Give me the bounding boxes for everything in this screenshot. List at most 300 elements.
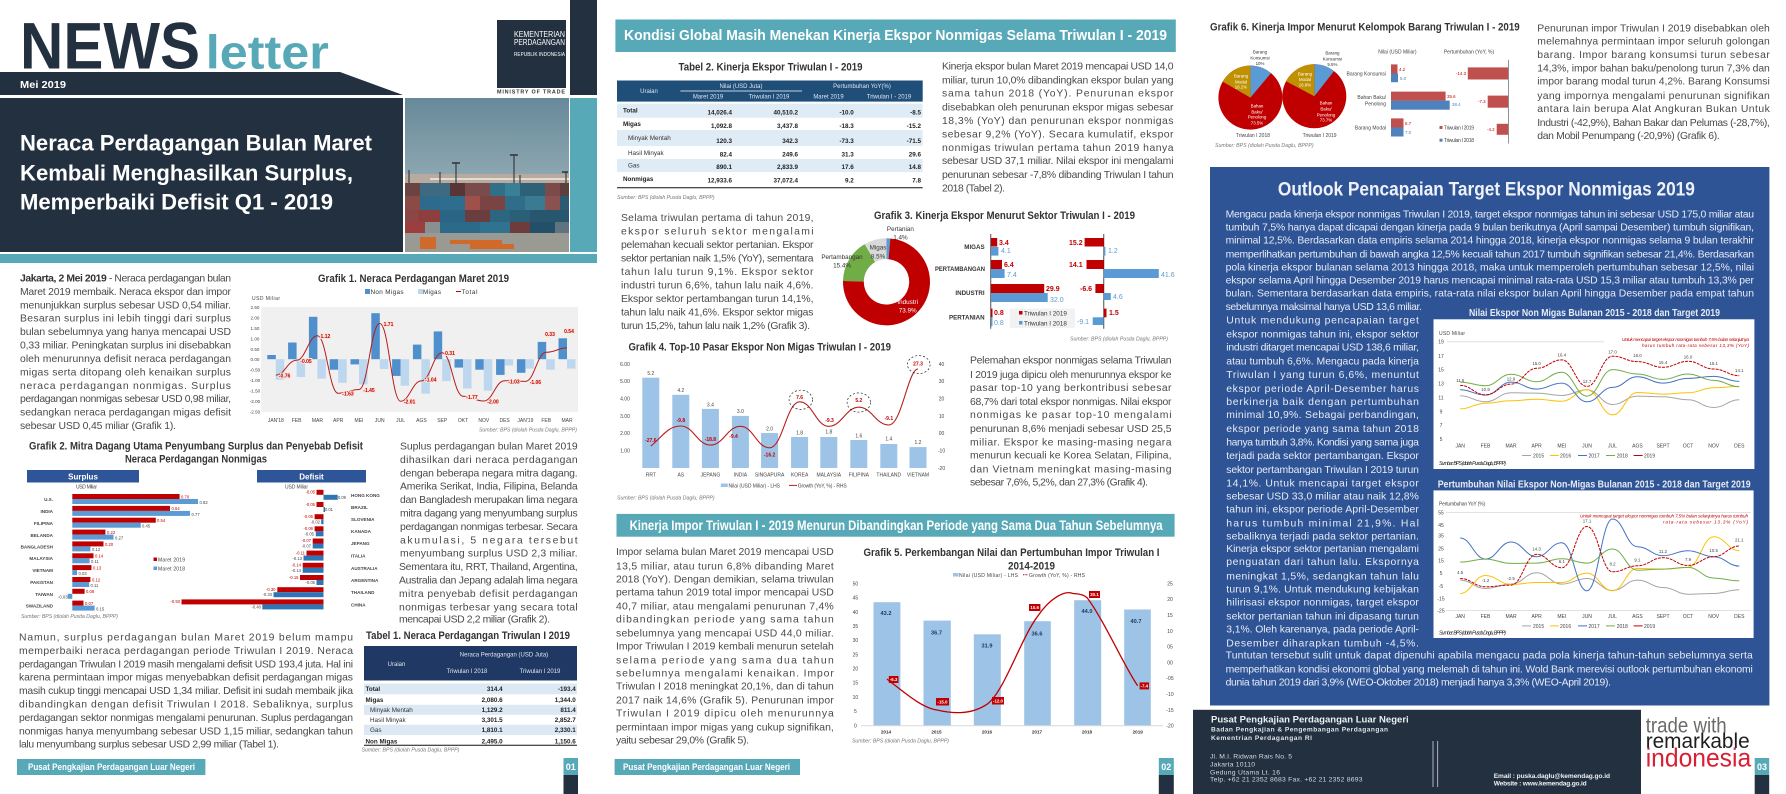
footer: contact: Telp. +62 21 2352 8683 Fax. +62 21 2352 8693	[1210, 776, 1363, 784]
chart: Grafik 1 neraca perdagangan: -2.50	[250, 410, 261, 414]
chart: Grafik 4 top-10: Nilai (USD Miliar) - LHS	[728, 483, 781, 489]
table: Tabel 1: 2,495.0	[482, 738, 503, 746]
chart: pertumbuhan ekspor bulanan: MAR	[1505, 614, 1517, 620]
footer: contact: Pusat Pengkajian Perdagangan Luar Negeri	[1211, 714, 1409, 726]
table: Tabel 1: 811.4	[560, 707, 576, 714]
chart: Grafik 6 impor barang: 5.0	[1400, 76, 1407, 81]
text block: impor: Triwulan I 2019 dipicu oleh menurunnya	[616, 708, 834, 720]
text block: outlook column: Desember diharapkan tumbuh -4,5%.	[1226, 638, 1419, 650]
chart: Grafik 5 impor: 2015	[931, 730, 942, 734]
chart: Grafik 4 top-10: -20	[938, 466, 945, 472]
chart: pertumbuhan ekspor bulanan: AGS	[1632, 614, 1643, 620]
chart: Grafik 6 impor barang	[1210, 21, 1520, 149]
donut chart	[843, 238, 930, 325]
chart: Grafik 6 impor barang: Barang	[1253, 50, 1268, 54]
chart: Grafik 3 sektor: Migas	[870, 244, 886, 252]
chart: Grafik 5 impor: 36.7	[931, 630, 942, 636]
chart: Grafik 2 mitra dagang: Maret 2018	[158, 566, 185, 572]
text block: outlook column: Untuk mendukung pencapaian target	[1226, 316, 1419, 326]
chart: Grafik 2 mitra dagang: -0.33	[262, 592, 273, 597]
chart: Grafik 1 neraca perdagangan: USD Miliar	[252, 296, 280, 302]
chart: Grafik 2 mitra dagang: -0.05	[304, 532, 315, 536]
chart: Grafik 2 mitra dagang: SWAZILAND	[26, 604, 54, 608]
footer: contact: Email : puska.daglu@kemendag.go.id	[1494, 773, 1610, 780]
chart: Grafik 6 impor barang: 16.2%	[1235, 84, 1247, 90]
chart: Grafik 5 impor: 15	[853, 680, 858, 686]
chart: Grafik 3 sektor: 0.8	[994, 320, 1004, 327]
chart: nilai ekspor bulanan: 12.7	[1583, 379, 1592, 384]
chart: pertumbuhan ekspor bulanan: 2019	[1644, 624, 1655, 630]
chart: Grafik 4 top-10: 2.0	[766, 426, 773, 432]
page number 02	[1159, 758, 1174, 794]
chart: Grafik 1 neraca perdagangan	[250, 273, 578, 434]
chart: Grafik 6 impor barang: Baku/	[1251, 110, 1263, 114]
text block: pelemahan: menurun kecuali ke Korea Selatan, Filipina,	[970, 450, 1172, 461]
text block: intro	[20, 274, 232, 432]
chart: Grafik 2 mitra dagang: -0.30	[266, 587, 276, 592]
chart: Grafik 6 impor barang: Konsumsi	[1250, 56, 1270, 60]
table: Tabel 2: -71.5	[907, 138, 921, 145]
chart: Grafik 4 top-10: 1.8	[825, 430, 832, 436]
chart: Grafik 3 sektor	[821, 210, 1175, 342]
text block: surplus partners: Suplus perdagangan bulan Maret 2019	[400, 442, 578, 452]
chart: Grafik 2 mitra dagang: BRAZIL	[351, 505, 368, 510]
chart: Grafik 2 mitra dagang: 0.11	[90, 583, 99, 588]
chart: Grafik 2 mitra dagang: -0.02	[310, 520, 321, 524]
chart: Grafik 5 impor: Nilai (USD Miliar) - LHS	[959, 573, 1019, 579]
chart: pertumbuhan ekspor bulanan: JAN	[1455, 614, 1465, 620]
text block: outlook intro: ekspor selama April hingga Desember 2019 harus mencapai minimal rata-rata USD 15,3 miliar atau tumbuh 13,3% per	[1226, 275, 1755, 286]
table: Tabel 1: 2,330.1	[555, 727, 576, 734]
panel: outlook: Outlook Pencapaian Target Ekspor Nonmigas 2019	[1278, 178, 1695, 200]
chart: Grafik 3 sektor: 1.4%	[893, 234, 908, 242]
chart: Grafik 1 neraca perdagangan: -1.00	[250, 378, 261, 383]
chart: pertumbuhan ekspor bulanan: -15	[1437, 596, 1445, 602]
chart: pertumbuhan ekspor bulanan: 2015	[1533, 624, 1544, 630]
footer: contact: Kementrian Perdagangan RI	[1211, 735, 1312, 742]
text block: outlook intro: minimal 12,5%. Berdasarkan data empiris selama 2014 hingga 2018, kinerja ekspor nonmigas selama 9 bulan terakhir	[1226, 236, 1755, 246]
chart: Grafik 5 impor: 2019	[1133, 730, 1143, 734]
chart: Grafik 5 impor: -12.0	[993, 698, 1004, 704]
chart: Grafik 2 mitra dagang: 0.27	[115, 536, 124, 540]
chart: Grafik 1 neraca perdagangan: JAN'18	[268, 418, 284, 424]
chart: Grafik 6 impor barang: 9.5%	[1327, 62, 1337, 67]
chart: Grafik 6 impor barang: 35.6	[1447, 94, 1456, 99]
chart: Grafik 6 impor barang: Pertumbuhan (YoY, %)	[1444, 50, 1494, 56]
chart: pertumbuhan ekspor bulanan: 10.5	[1709, 548, 1719, 553]
chart: Grafik 4 top-10: 3.4	[707, 402, 714, 408]
chart: pertumbuhan ekspor bulanan: JUN	[1582, 614, 1592, 620]
chart: Grafik 5 impor: 2018	[1082, 730, 1093, 734]
chart: Grafik 4 top-10: 4.2	[677, 388, 684, 394]
text block: surplus partners: nonmigas terbesar yang secara total	[399, 602, 578, 613]
table: Tabel 1: 1,810.1	[482, 727, 503, 734]
text block: intro: 0,33 miliar. Peningkatan surplus ini disebabkan	[20, 341, 231, 352]
chart: Grafik 2 mitra dagang: MALAYSIA	[29, 556, 54, 561]
table: Tabel 1: 1,344.0	[555, 697, 576, 704]
chart: pertumbuhan ekspor bulanan: 4.5	[1457, 570, 1464, 575]
text block: outlook column: harus tumbuh minimal 21,9%. Hal	[1226, 518, 1419, 530]
text block: impor: 40,7 miliar, atau mengalami penurunan 7,4%	[616, 601, 834, 612]
chart: nilai ekspor bulanan: 2015	[1533, 454, 1544, 460]
chart: Grafik 5 impor: -15.0	[937, 700, 948, 704]
table: Tabel 1: Uraian	[388, 662, 405, 668]
chart: Grafik 1 neraca perdagangan: Sumber: BPS (diolah Pusda Daglu, BPPP)	[479, 428, 577, 434]
chart: pertumbuhan ekspor bulanan: 8.2	[1609, 562, 1616, 566]
text block: impor: 2018 (YoY). Dengan demikian, selama triwulan	[616, 574, 834, 585]
chart: Grafik 2 mitra dagang: U.S.	[44, 497, 53, 502]
chart: Grafik 4 top-10: -27.6	[645, 438, 657, 444]
chart: Grafik 4 top-10: 6.00	[620, 362, 630, 368]
table: Tabel 2: 342.3	[782, 138, 798, 145]
chart: Grafik 1 neraca perdagangan: -0.76	[279, 374, 291, 380]
chart: nilai ekspor bulanan: Untuk mencapai target ekspor nonmigas tumbuh 7,5% bulan selanjutnya	[1622, 337, 1749, 342]
table: Tabel 2: 249.6	[782, 152, 798, 158]
chart: Grafik 5 impor	[852, 547, 1174, 744]
text block: surplus partners: dan Bangladesh merupakan lima negara	[400, 495, 578, 506]
table: Tabel 1: Minyak Mentah	[370, 707, 413, 714]
text block: impor barang: 14,3%, impor bahan baku/penolong turun 7,3% dan	[1537, 64, 1770, 74]
text block: outlook intro: sebelumnya maksimal hanya USD 13,6 miliar.	[1226, 302, 1422, 313]
chart: Grafik 4 top-10: THAILAND	[876, 472, 902, 478]
chart: Grafik 2 mitra dagang: 0.70	[181, 494, 190, 500]
chart: Grafik 2 mitra dagang: HONG KONG	[351, 493, 380, 498]
text block: intro: Besaran surplus ini lebih tinggi dari surplus	[20, 314, 231, 325]
chart: Grafik 2 mitra dagang: KANADA	[351, 529, 372, 534]
text block: triwulan balance: memperbaiki neraca perdagangan periode Triwulan I 2019. Neraca	[19, 646, 353, 657]
chart: pertumbuhan ekspor bulanan: 11.2	[1659, 549, 1668, 554]
chart: pertumbuhan ekspor bulanan: Pertumbuhan Nilai Ekspor Non-Migas Bulanan 2015 - 2018 dan Target 2019	[1438, 480, 1751, 490]
chart: Grafik 4 top-10: RRT	[646, 472, 656, 478]
chart: nilai ekspor bulanan	[1434, 308, 1754, 469]
chart: nilai ekspor bulanan: 19	[1438, 340, 1444, 346]
chart: pertumbuhan ekspor bulanan: 9.1	[1634, 558, 1641, 562]
logo: trade with remarkable indonesia	[1646, 714, 1752, 772]
chart: Grafik 5 impor: -7.4	[1141, 684, 1149, 689]
chart: Grafik 1 neraca perdagangan: 0.00	[251, 357, 260, 362]
table: Tabel 2: Maret 2019	[813, 94, 844, 100]
photo: container port	[405, 98, 569, 252]
text block: outlook column	[1226, 316, 1419, 650]
chart: Grafik 2 mitra dagang: PAKISTAN	[30, 580, 54, 585]
chart: pertumbuhan ekspor bulanan: 2016	[1560, 624, 1571, 630]
text block: triwulan balance: karena permintaan impor migas menyebabkan defisit perdagangan migas	[19, 673, 353, 684]
footer: contact: Gedung Utama Lt. 16	[1210, 770, 1280, 776]
chart: Grafik 2 mitra dagang: ARGENTINA	[351, 578, 379, 583]
chart: Grafik 2 mitra dagang: 0.64	[172, 506, 180, 511]
text block: intro: Jakarta, 2 Mei 2019 - Neraca perdagangan bulan	[20, 274, 231, 284]
chart: Grafik 4 top-10: 7.6	[796, 395, 803, 401]
text block: triwulan balance: Namun, surplus perdagangan bulan Maret 2019 belum mampu	[19, 632, 353, 644]
text block: outlook closing: Tuntutan tersebut sulit untuk dapat dipenuhi apabila mengacu pada pola kinerja tahun-tahun sebelumnya serta	[1226, 650, 1753, 662]
chart: Grafik 4 top-10: 3.0	[737, 409, 744, 415]
chart: nilai ekspor bulanan: 16.0	[1684, 354, 1693, 360]
chart: Grafik 3 sektor: Industri	[897, 299, 918, 306]
chart: Grafik 3 sektor: 8.5%	[871, 254, 886, 260]
chart: Grafik 6 impor barang: -4.2	[1487, 127, 1495, 132]
chart: Grafik 5 impor: 44.0	[1082, 609, 1092, 615]
text block: intro: migas serta ditopang oleh kenaikan surplus	[20, 367, 231, 378]
table: Tabel 2: 2,833.9	[777, 164, 798, 171]
chart: Grafik 2 mitra dagang: 0.03	[78, 571, 87, 576]
chart: Grafik 1 neraca perdagangan: DES	[499, 418, 510, 424]
text block: outlook intro: Mengacu pada kinerja ekspor nonmigas Triwulan I 2019, target ekspor nonmigas tahun ini sebesar USD 175,0 miliar atau	[1226, 210, 1754, 220]
chart: pertumbuhan ekspor bulanan	[1434, 480, 1754, 638]
table: Tabel 1: Gas	[370, 727, 382, 734]
chart: Grafik 1 neraca perdagangan: -1.77	[466, 395, 478, 401]
chart: pertumbuhan ekspor bulanan: 17.1	[1583, 518, 1592, 524]
masthead: NEWSletter	[20, 9, 329, 83]
chart: pertumbuhan ekspor bulanan: NOV	[1708, 614, 1720, 620]
chart: nilai ekspor bulanan: JUN	[1582, 443, 1592, 449]
chart: Grafik 2 mitra dagang: TAIWAN	[35, 592, 54, 597]
chart: Grafik 5 impor: -15	[1166, 708, 1174, 714]
table: Tabel 1	[362, 630, 577, 754]
chart: Grafik 3 sektor: -6.6	[1080, 286, 1092, 293]
chart: Grafik 2 mitra dagang: -0.05	[305, 580, 316, 585]
chart: Grafik 5 impor: 2016	[982, 730, 993, 734]
table: Tabel 2: -18.3	[839, 123, 854, 130]
chart: pertumbuhan ekspor bulanan: 55	[1438, 510, 1444, 516]
chart: Grafik 6 impor barang: 4.2	[1399, 67, 1406, 72]
text block: kinerja ekspor	[942, 62, 1174, 194]
chart: Grafik 6 impor barang: Triwulan I 2018	[1236, 133, 1270, 139]
chart: Grafik 2 mitra dagang: 0.12	[92, 578, 101, 582]
chart: Grafik 1 neraca perdagangan: MAR	[312, 418, 323, 424]
table: Tabel 2: -10.0	[839, 110, 854, 117]
headline panel: Memperbaiki Defisit Q1 - 2019	[20, 190, 333, 214]
chart: Grafik 3 sektor: 32.0	[1050, 297, 1064, 304]
text block: outlook column: berkinerja baik dengan pertumbuhan	[1226, 397, 1419, 408]
masthead: NEWSletter: letter	[206, 26, 329, 79]
text block: intro: menunjukkan surplus sebesar USD 0,54 miliar.	[20, 300, 231, 311]
panel: outlook	[1210, 167, 1769, 706]
chart: nilai ekspor bulanan: harus tumbuh rata-rata sebesar 13,3% (YoY)	[1642, 343, 1749, 348]
chart: Grafik 5 impor: 0	[854, 724, 857, 730]
text block: outlook column: terjadi pada sektor pertambangan. Ekspor	[1226, 451, 1419, 462]
chart: nilai ekspor bulanan: 10.9	[1481, 387, 1490, 392]
chart: Grafik 1 neraca perdagangan: JUL	[396, 418, 405, 424]
chart: Grafik 5 impor: 10	[1167, 629, 1173, 635]
chart: pertumbuhan ekspor bulanan: 15	[1438, 558, 1444, 564]
chart: Grafik 2 mitra dagang: ITALIA	[351, 554, 366, 558]
text block: surplus partners: akumulasi, 5 negara tersebut	[400, 535, 578, 546]
chart: Grafik 2 mitra dagang: -0.40	[251, 604, 262, 610]
chart: Grafik 5 impor: 15	[1167, 613, 1173, 619]
chart: pertumbuhan ekspor bulanan: rata-rata sebesar 13,3% (YoY)	[1663, 520, 1748, 524]
chart: Grafik 4 top-10: 5.2	[647, 371, 654, 377]
chart: Grafik 6 impor barang: -7.3	[1478, 99, 1486, 104]
chart: pertumbuhan ekspor bulanan: -25	[1437, 608, 1445, 614]
chart: Grafik 5 impor: 2014	[881, 730, 892, 734]
chart: Grafik 5 impor: 50	[853, 582, 858, 588]
chart: Grafik 3 sektor: 4.6	[1113, 294, 1123, 301]
table: Tabel 2: Nonmigas	[623, 176, 654, 183]
chart: Grafik 1 neraca perdagangan: Non Migas	[370, 289, 404, 296]
chart: Grafik 1 neraca perdagangan: JAN'19	[517, 418, 534, 424]
table: Tabel 2: 12,933.6	[707, 178, 732, 185]
chart: Grafik 1 neraca perdagangan: 1.50	[251, 326, 260, 331]
text block: sektor: sektor pertanian naik 1,5% (YoY), sementara	[621, 254, 814, 265]
chart: Grafik 6 impor barang: -14.3	[1456, 71, 1467, 76]
chart: Grafik 2 mitra dagang: -0.14	[291, 562, 302, 568]
table: Tabel 2: Gas	[628, 162, 640, 170]
chart: Grafik 4 top-10: 3.00	[620, 414, 630, 420]
text block: surplus partners: menyumbang surplus USD 2,3 miliar.	[400, 549, 578, 560]
chart: Grafik 6 impor barang: Konsumsi	[1323, 56, 1342, 62]
text block: outlook intro: memperlihatkan pertumbuhan di bawah angka 12,5% kecuali tahun 2017 tumbuh signifikan sebesar 21,4%. Berdasarkan	[1226, 250, 1754, 260]
footer tag page 2: Pusat Pengkajian Perdagangan Luar Negeri	[623, 762, 790, 772]
chart: Grafik 2 mitra dagang: 0.01	[325, 507, 334, 512]
chart: Grafik 2 mitra dagang: USD Miliar	[76, 484, 97, 490]
chart: Grafik 3 sektor: 7.4	[1007, 272, 1017, 279]
chart: Grafik 5 impor: 20	[1167, 597, 1173, 603]
chart: Grafik 6 impor barang: Bahan	[1251, 104, 1264, 108]
logo: Kementerian Perdagangan: KEMENTERIAN	[514, 30, 565, 39]
text block: outlook column: ekspor periode April-Desember harus	[1226, 384, 1419, 395]
chart: pertumbuhan ekspor bulanan: -2.5	[1507, 576, 1515, 581]
chart: pertumbuhan ekspor bulanan: FEB	[1481, 614, 1491, 620]
text block: outlook column: hanya tumbuh 3,8%. Kondisi yang sama juga	[1226, 437, 1419, 448]
table: Tabel 1: 2,852.7	[555, 717, 576, 724]
chart: nilai ekspor bulanan: NOV	[1708, 443, 1720, 449]
table: Tabel 2: Uraian	[640, 89, 658, 95]
table: Tabel 2: -15.2	[907, 123, 921, 130]
chart: Grafik 1 neraca perdagangan: MEI	[355, 418, 363, 424]
chart: Grafik 5 impor: Growth (YoY, %) - RHS	[1029, 573, 1086, 579]
text block: impor barang: impor barang modal turun 4,2%. Barang Konsumsi	[1537, 77, 1770, 88]
text block: impor barang: antara lain berupa Alat Angkuran Bukan Untuk	[1537, 104, 1771, 115]
date banner	[0, 72, 403, 95]
chart: Grafik 5 impor: Sumber: BPS (diolah Pusda Daglu, BPPP)	[852, 738, 949, 744]
page 1	[0, 0, 597, 794]
chart: Grafik 2 mitra dagang: 0.11	[91, 559, 100, 564]
chart: Grafik 5 impor: 2014-2019	[1008, 560, 1055, 572]
chart: Grafik 5 impor: -10	[1166, 692, 1174, 698]
chart: Grafik 2 mitra dagang: -0.07	[301, 544, 312, 548]
text block: kinerja ekspor: 2018 (Tabel 2).	[942, 183, 1005, 194]
table: Tabel 2: 120.3	[716, 138, 732, 145]
table: Tabel 1: Non Migas	[366, 738, 398, 746]
page number 01	[564, 758, 578, 794]
text block: surplus partners: mitra dagang yang menyumbang surplus	[400, 508, 578, 520]
chart: Grafik 5 impor: 25	[853, 652, 858, 658]
table: Tabel 1: 2,080.6	[482, 697, 503, 704]
chart: Grafik 5 impor: 31.9	[982, 643, 992, 649]
chart: Grafik 2 mitra dagang: Surplus	[68, 472, 98, 482]
chart: Grafik 2 mitra dagang: Sumber: BPS (diolah Pusda Daglu, BPPP)	[21, 614, 118, 620]
chart: Grafik 2 mitra dagang: USD Miliar	[285, 484, 308, 490]
chart: nilai ekspor bulanan: AGS	[1632, 443, 1643, 449]
text block: pelemahan: miliar. Ekspor ke masing-masing negara	[970, 437, 1172, 448]
chart: Grafik 2 mitra dagang: 0.08	[86, 589, 95, 594]
chart: Grafik 1 neraca perdagangan: Grafik 1. Neraca Perdagangan Maret 2019	[318, 273, 509, 285]
chart: Grafik 5 impor: 05	[1167, 644, 1173, 650]
text block: kinerja ekspor: disebabkan oleh penurunan ekspor migas sebesar	[942, 102, 1174, 114]
logo: Kementerian Perdagangan: MINISTRY OF TRADE	[497, 90, 565, 96]
chart: Grafik 1 neraca perdagangan: 0.50	[251, 347, 260, 352]
table: Tabel 2: Tabel 2. Kinerja Ekspor Triwulan I - 2019	[678, 62, 862, 74]
chart: pertumbuhan ekspor bulanan: Untuk mencapai target ekspor nonmigas tumbuh 7,5% bulan selanjutnya harus tumbuh	[1580, 514, 1748, 518]
text block: outlook column: 14,1%. Untuk mencapai target ekspor	[1226, 478, 1419, 490]
chart: Grafik 6 impor barang: 6.7	[1405, 121, 1412, 126]
chart: Grafik 2 mitra dagang: BANGLADESH	[21, 544, 54, 550]
text block: outlook column: 3,1%. Oleh karenanya, pada periode April-	[1226, 624, 1419, 635]
chart: Grafik 4 top-10: 27.3	[913, 362, 923, 368]
chart: Grafik 1 neraca perdagangan: JUN	[375, 418, 385, 424]
chart: Grafik 1 neraca perdagangan: 1.71	[384, 322, 394, 328]
chart: Grafik 2 mitra dagang: -0.06	[303, 514, 314, 519]
chart: nilai ekspor bulanan: FEB	[1481, 443, 1491, 449]
chart: Grafik 5 impor: 43.2	[881, 611, 891, 617]
chart: Grafik 6 impor barang: Barang	[1325, 50, 1340, 56]
chart: nilai ekspor bulanan: 13	[1438, 382, 1444, 388]
chart: Grafik 4 top-10: INDIA	[734, 472, 748, 478]
text block: outlook column: industri ditarget mencapai USD 138,6 miliar,	[1226, 343, 1419, 354]
chart: Grafik 2 mitra dagang: -0.14	[291, 568, 302, 573]
table: Tabel 2: 3,437.8	[777, 123, 798, 130]
chart: Grafik 6 impor barang: 16.8%	[1299, 82, 1311, 88]
text block: outlook closing	[1226, 650, 1753, 688]
footer: contact: Website : www.kemendag.go.id	[1494, 781, 1587, 788]
table: Tabel 1: Neraca Perdagangan (USD Juta)	[460, 652, 548, 658]
text block: outlook column: turun 9,1%. Untuk mendukung kebijakan	[1226, 584, 1419, 595]
chart: nilai ekspor bulanan: 2018	[1617, 454, 1628, 460]
text block: surplus partners	[399, 442, 578, 626]
text block: outlook column: Triwulan I yang turun 6,6%, menuntut	[1226, 370, 1419, 381]
chart: Grafik 3 sektor: 29.9	[1046, 286, 1060, 293]
table: Tabel 1: 1,129.2	[482, 707, 503, 714]
page 3	[1193, 21, 1771, 794]
pie: 2019	[1282, 64, 1346, 128]
chart: Grafik 3 sektor: 73.9%	[899, 308, 917, 314]
text block: intro: oleh menurunnya defisit neraca perdagangan	[20, 354, 231, 365]
text block: surplus partners: mencapai USD 2,2 miliar (Grafik 2).	[399, 615, 550, 626]
chart: Grafik 4 top-10: 30	[939, 379, 944, 385]
table: Tabel 2: Pertumbuhan YoY(%)	[833, 84, 891, 90]
chart: Grafik 1 neraca perdagangan: 1.00	[251, 336, 260, 342]
table: Tabel 2: Sumber: BPS (diolah Pusda Daglu, BPPP)	[617, 195, 715, 201]
chart: Grafik 5 impor: -05	[1166, 676, 1174, 682]
chart: pertumbuhan ekspor bulanan: Pertumbuhan YoY (%)	[1439, 502, 1485, 508]
chart: Grafik 2 mitra dagang: -0.15	[289, 575, 299, 580]
chart: Grafik 1 neraca perdagangan: -1.50	[250, 388, 261, 394]
chart: Grafik 4 top-10: -9.1	[884, 416, 893, 422]
section header: impor: Kinerja Impor Triwulan I - 2019 Menurun Dibandingkan Periode yang Sama Dua Tahun Sebelumnya	[630, 518, 1163, 533]
text block: kinerja ekspor: sebesar USD 37,1 miliar. Nilai ekspor ini mengalami	[942, 156, 1174, 167]
table: Tabel 2: 37,072.4	[773, 178, 798, 185]
table: Tabel 1: 1,150.6	[555, 738, 576, 746]
section header: ekspor: Kondisi Global Masih Menekan Kinerja Ekspor Nonmigas Selama Triwulan I - 2019	[624, 27, 1167, 44]
table: Tabel 2: Maret 2019	[693, 94, 724, 100]
section header: impor	[616, 514, 1175, 537]
chart: Grafik 6 impor barang: 10%	[1256, 61, 1264, 66]
text block: impor: pertama tahun 2019 total impor mencapai USD	[616, 587, 834, 598]
text block: impor barang: yang impornya mengalami penurunan signifikan	[1537, 91, 1770, 102]
chart: Grafik 6 impor barang: Grafik 6. Kinerja Impor Menurut Kelompok Barang Triwulan I - 2019	[1210, 21, 1520, 33]
text block: outlook column: sektor pertambangan Triwulan I 2019 turun	[1226, 465, 1419, 476]
chart: nilai ekspor bulanan: 2017	[1588, 454, 1600, 460]
text block: kinerja ekspor: sebesar 9,2% (YoY). Secara kumulatif, ekspor	[942, 130, 1174, 141]
chart: Grafik 2 mitra dagang: INDIA	[40, 509, 54, 514]
chart: nilai ekspor bulanan: JAN	[1455, 443, 1465, 449]
chart: Grafik 2 mitra dagang: 0.09	[338, 495, 347, 500]
text block: outlook column: hilirisasi ekspor nonmigas, target ekspor	[1226, 597, 1419, 608]
chart: Grafik 4 top-10: FILIPINA	[849, 472, 870, 478]
chart: Grafik 4 top-10: Growth (YoY, %) - RHS	[798, 483, 847, 489]
chart: Grafik 5 impor: 5	[854, 709, 857, 715]
chart: Grafik 6 impor barang: Baku/	[1320, 106, 1332, 112]
